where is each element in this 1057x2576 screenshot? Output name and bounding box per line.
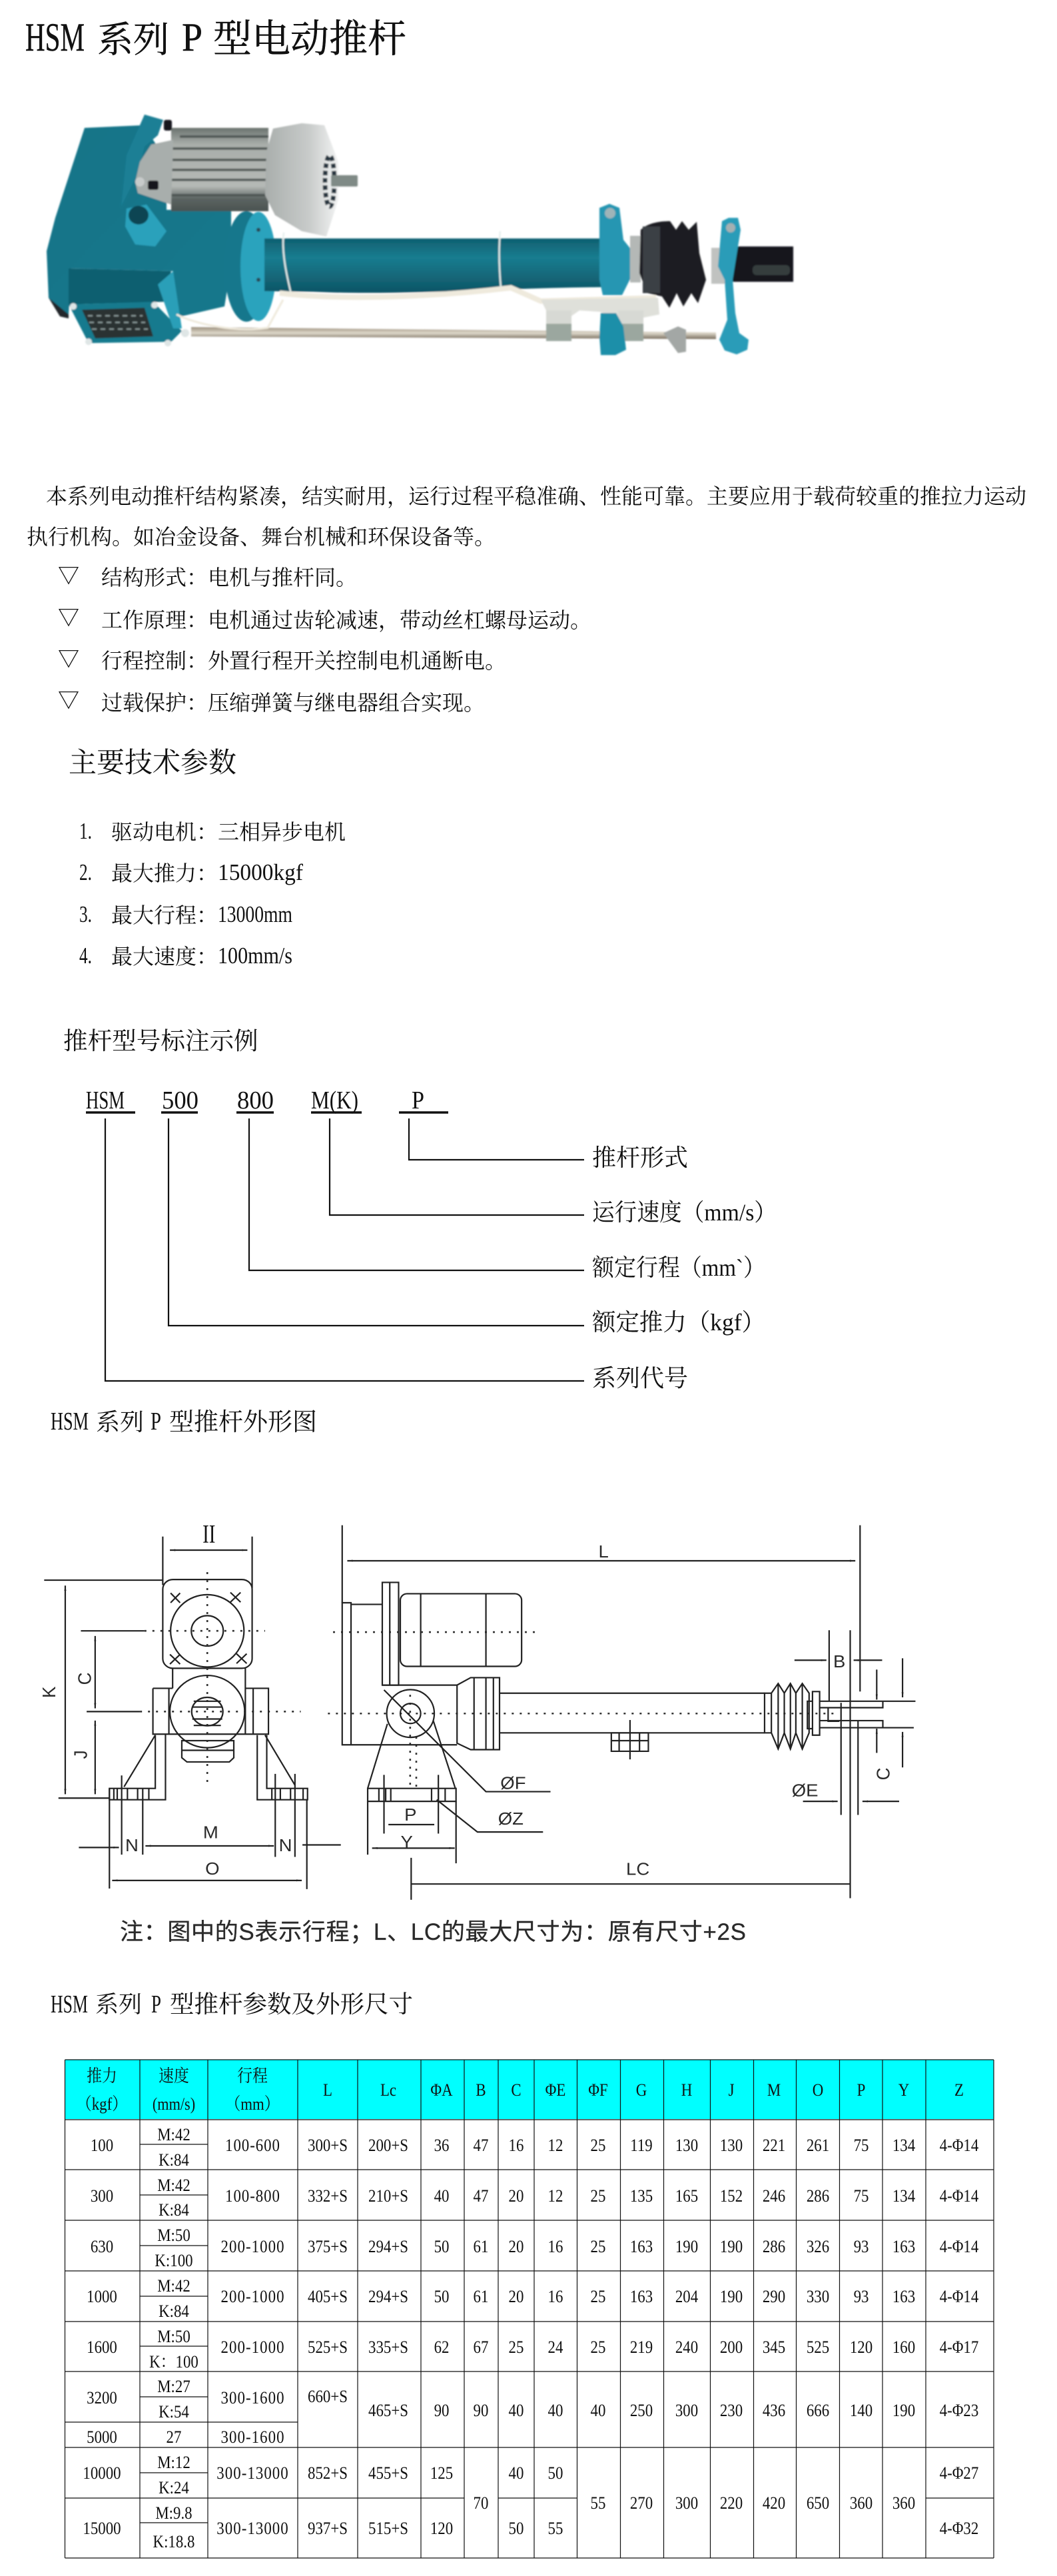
table row 1600: 335+S: [368, 2338, 408, 2357]
table row 1600: 160: [892, 2338, 915, 2357]
table row 300: 40: [434, 2187, 449, 2206]
table row 100: 300+S: [308, 2136, 348, 2155]
model notation diagram: 500: [162, 1086, 198, 1114]
table row 300: 246: [763, 2187, 785, 2206]
table rows 3200 and 5000: 300-1600: [220, 2389, 284, 2407]
parameter list: [79, 818, 346, 969]
parameter list: 100mm/s: [218, 943, 292, 969]
cone stop: [663, 326, 686, 353]
table row 10000: 4-Φ27: [940, 2464, 978, 2483]
table row 1600: 25: [509, 2338, 524, 2357]
heading: parameters and dimensions: 型推杆参数及外形尺寸: [170, 1990, 413, 2018]
table row 100: 221: [763, 2136, 785, 2155]
table header row: ΦF: [588, 2081, 608, 2100]
heading: parameters and dimensions: P: [151, 1990, 161, 2018]
table header background: [65, 2060, 994, 2119]
table row 300: 4-Φ14: [940, 2187, 978, 2206]
table row 100: [91, 2126, 978, 2170]
intro paragraph: 执行机构。如冶金设备、舞台机械和环保设备等。: [27, 525, 496, 549]
limit switch brackets: [541, 298, 659, 341]
table rows 3200 and 5000: 465+S: [368, 2401, 408, 2420]
table row 630: 163: [892, 2238, 915, 2256]
heading: outline drawing: 系列: [96, 1409, 144, 1436]
table row 1000: 204: [675, 2288, 698, 2306]
feature bullet list: 行程控制：外置行程开关控制电机通断电。: [101, 649, 506, 673]
table row 1000: 190: [720, 2288, 743, 2306]
table row 1000: 25: [591, 2288, 605, 2306]
table row 100: 130: [720, 2136, 743, 2155]
table row 300: K:84: [159, 2201, 189, 2220]
table row 630: 190: [675, 2238, 698, 2256]
drawing: side view: ØZ: [498, 1809, 524, 1829]
parameter list: 最大行程：: [111, 903, 218, 927]
dark rear cover: [49, 293, 69, 318]
table header row: ΦE: [545, 2081, 565, 2100]
table row 300: 286: [807, 2187, 829, 2206]
table row 1000: [87, 2277, 978, 2321]
drawing: front view: [39, 1519, 341, 1889]
table row 1000: 50: [434, 2288, 449, 2306]
table rows 3200 and 5000: 436: [763, 2401, 785, 2420]
table row 10000: 40: [509, 2464, 524, 2483]
table row 300: 100-800: [225, 2187, 280, 2206]
heading: outline drawing: [51, 1408, 317, 1436]
table row 1000: M:42: [157, 2277, 190, 2296]
table row 10000: K:24: [159, 2479, 189, 2497]
bellows: [639, 221, 706, 308]
table row 100: 261: [807, 2136, 829, 2155]
table row 1600: 525: [807, 2338, 829, 2357]
parameter list: 3.: [79, 901, 92, 927]
table header row: P: [857, 2081, 865, 2100]
parameter list: 最大速度：: [111, 945, 218, 969]
table rows 3200 and 5000: 230: [720, 2401, 743, 2420]
table row 100: 25: [591, 2136, 605, 2155]
table row 300: 332+S: [308, 2187, 348, 2206]
table header row: Y: [898, 2081, 910, 2100]
model notation diagram: [86, 1086, 777, 1392]
table row 1600: 1600: [87, 2338, 117, 2357]
table row 1600: 120: [850, 2338, 873, 2357]
lower clamp: [599, 313, 626, 355]
table row 15000: 4-Φ32: [940, 2519, 978, 2538]
table row 1000: 200-1000: [220, 2288, 284, 2306]
table row 630: 4-Φ14: [940, 2238, 978, 2256]
table row 630: 294+S: [368, 2238, 408, 2256]
table row 1600: 25: [591, 2338, 605, 2357]
title: HSM: [25, 15, 85, 59]
table row 630: M:50: [157, 2226, 190, 2245]
table row 630: 25: [591, 2238, 605, 2256]
table row 1600: 219: [630, 2338, 653, 2357]
table rows 3200 and 5000: 5000: [87, 2428, 117, 2447]
feature bullet list: ▽: [58, 564, 79, 588]
model notation diagram: 运行速度（mm/s）: [592, 1199, 777, 1226]
table row 100: 130: [675, 2136, 698, 2155]
parameter list: 最大推力：: [111, 861, 218, 885]
table row 1600: M:50: [157, 2328, 190, 2346]
table row 10000: 125: [430, 2464, 453, 2483]
heading: parameters and dimensions: 系列: [95, 1992, 142, 2018]
table header row: Z: [954, 2081, 964, 2100]
table row 1600: K：100: [149, 2353, 198, 2371]
table row 1600: 62: [434, 2338, 449, 2357]
table row 100: 4-Φ14: [940, 2136, 978, 2155]
table header row: G: [636, 2081, 647, 2100]
motor end shield: [135, 140, 173, 205]
table row 300: 47: [474, 2187, 488, 2206]
table row 1000: 290: [763, 2288, 785, 2306]
table rows 3200 and 5000: K:54: [159, 2403, 189, 2421]
table rows 3200 and 5000: 40: [509, 2401, 524, 2420]
table row 1000: 163: [892, 2288, 915, 2306]
table row 1000: K:84: [159, 2302, 189, 2321]
table row 100: 75: [854, 2136, 869, 2155]
parameter table: [65, 2060, 994, 2558]
drawing: side view: P: [404, 1805, 417, 1825]
drawing: side view: LC: [626, 1859, 649, 1879]
model notation diagram: P: [412, 1086, 424, 1114]
table rows 3200 and 5000: 4-Φ23: [940, 2401, 978, 2420]
table row 1600: 525+S: [308, 2338, 348, 2357]
table grid lines: [65, 2060, 994, 2558]
table row 15000: 120: [430, 2519, 453, 2538]
table header row: Lc: [380, 2081, 396, 2100]
table rows 3200 and 5000: 300-1600: [220, 2428, 284, 2447]
model notation diagram: 系列代号: [592, 1365, 688, 1392]
drawing: front view: O: [205, 1859, 220, 1879]
table row 300: 25: [591, 2187, 605, 2206]
product photo: electric push rod: [47, 115, 793, 355]
drawing: front view: J: [71, 1750, 91, 1759]
table row 10000: 300-13000: [216, 2464, 288, 2483]
motor ribbed housing: [171, 128, 268, 211]
table row 100: 134: [892, 2136, 915, 2155]
table row 100: 119: [630, 2136, 653, 2155]
table header row: L: [323, 2081, 332, 2100]
parameter list: 2.: [79, 859, 92, 885]
table row 300: 20: [509, 2187, 524, 2206]
table row 1600: 240: [675, 2338, 698, 2357]
feature bullet list: ▽: [58, 606, 79, 630]
table row 1000: 93: [854, 2288, 869, 2306]
table row 1000: 16: [548, 2288, 563, 2306]
table row 100: 200+S: [368, 2136, 408, 2155]
cable boss: [125, 205, 167, 246]
silver collar: [630, 236, 641, 282]
table row 100: 12: [548, 2136, 563, 2155]
merged cells for rows 10000 and 15000: 270: [630, 2494, 653, 2513]
heading: outline drawing: 型推杆外形图: [169, 1408, 317, 1436]
parameter list: 驱动电机：三相异步电机: [111, 820, 346, 844]
drawing: side view: C: [873, 1767, 894, 1780]
feature bullet list: ▽: [58, 688, 79, 712]
table row 1000: 405+S: [308, 2288, 348, 2306]
model notation diagram: 推杆形式: [592, 1144, 688, 1171]
table row 100: 47: [474, 2136, 488, 2155]
table rows 3200 and 5000: 300: [675, 2401, 698, 2420]
table header row: 推力: [87, 2066, 117, 2086]
parameter list: 4.: [79, 943, 92, 969]
table rows 3200 and 5000: [87, 2377, 978, 2447]
feature bullet list: [58, 564, 591, 715]
table row 630: 16: [548, 2238, 563, 2256]
gearbox body: [47, 125, 231, 318]
drawing: front view: N: [125, 1836, 139, 1855]
drawing: front view: M: [203, 1823, 218, 1842]
table row 15000: 15000: [83, 2519, 121, 2538]
table row 100: K:84: [159, 2151, 189, 2170]
table row 10000: 50: [548, 2464, 563, 2483]
table rows 3200 and 5000: 660+S: [308, 2387, 348, 2406]
title: 系列: [97, 20, 169, 60]
merged cells for rows 10000 and 15000: 300: [675, 2494, 698, 2513]
model notation diagram: 额定行程（mm`）: [592, 1254, 765, 1281]
drawing: side view: Y: [401, 1833, 413, 1852]
title: [25, 15, 406, 61]
table rows 3200 and 5000: 250: [630, 2401, 653, 2420]
drawing: side view: ØF: [500, 1773, 526, 1793]
table row 10000: [83, 2453, 978, 2497]
table row 1000: 330: [807, 2288, 829, 2306]
table row 1600: 24: [548, 2338, 563, 2357]
feature bullet list: 过载保护：压缩弹簧与继电器组合实现。: [101, 691, 485, 715]
table row 1600: 4-Φ17: [940, 2338, 978, 2357]
drawing: side view: L: [598, 1542, 609, 1561]
merged cells for rows 10000 and 15000: 420: [763, 2494, 785, 2513]
table row 10000: 455+S: [368, 2464, 408, 2483]
table header row: 行程: [237, 2066, 268, 2086]
drawing: front view: K: [39, 1686, 59, 1698]
merged cells for rows 10000 and 15000: [474, 2494, 915, 2513]
drawing: side view: ØE: [792, 1781, 819, 1800]
table rows 3200 and 5000: 40: [591, 2401, 605, 2420]
tube flange: [224, 211, 276, 322]
table header row: H: [681, 2081, 692, 2100]
table header row: J: [729, 2081, 735, 2100]
fan cover: [265, 123, 358, 236]
table rows 3200 and 5000: 40: [548, 2401, 563, 2420]
table rows 3200 and 5000: 90: [474, 2401, 488, 2420]
title: 型电动推杆: [213, 17, 406, 61]
table row 15000: 300-13000: [216, 2519, 288, 2538]
table row 300: 135: [630, 2187, 653, 2206]
table row 1600: 200-1000: [220, 2338, 284, 2357]
merged cells for rows 10000 and 15000: 55: [591, 2494, 605, 2513]
table header row: M: [767, 2081, 781, 2100]
table row 10000: M:12: [157, 2453, 190, 2472]
table row 1000: 1000: [87, 2288, 117, 2306]
rod end: [711, 248, 730, 284]
table row 300: 152: [720, 2187, 743, 2206]
table rows 3200 and 5000: 90: [434, 2401, 449, 2420]
table row 15000: 50: [509, 2519, 524, 2538]
drawing note: 注：图中的S表示行程；L、LC的最大尺寸为：原有尺寸+2S: [120, 1919, 746, 1945]
table row 630: 326: [807, 2238, 829, 2256]
table row 630: 286: [763, 2238, 785, 2256]
table row 15000: 55: [548, 2519, 563, 2538]
feature bullet list: 结构形式：电机与推杆同。: [101, 566, 357, 590]
table rows 3200 and 5000: 3200: [87, 2389, 117, 2407]
table header row: B: [476, 2081, 486, 2100]
table row 630: 93: [854, 2238, 869, 2256]
table row 630: 20: [509, 2238, 524, 2256]
table row 630: 50: [434, 2238, 449, 2256]
table row 1000: 61: [474, 2288, 488, 2306]
heading: parameters and dimensions: [51, 1990, 413, 2018]
front clamp: [599, 204, 631, 295]
table header row: （kgf）: [77, 2095, 127, 2114]
parameter list: 1.: [79, 818, 92, 844]
merged cells for rows 10000 and 15000: 220: [720, 2494, 743, 2513]
white cable: [280, 288, 656, 301]
intro paragraph: 本系列电动推杆结构紧凑，结实耐用，运行过程平稳准确、性能可靠。主要应用于载荷较重的推拉力运动: [46, 484, 1026, 508]
table row 630: 200-1000: [220, 2238, 284, 2256]
feature bullet list: 工作原理：电机通过齿轮减速，带动丝杠螺母运动。: [101, 608, 591, 632]
parameter list: 15000kgf: [218, 859, 303, 885]
table rows 3200 and 5000: 27: [167, 2428, 181, 2447]
merged cells for rows 10000 and 15000: 650: [807, 2494, 829, 2513]
table row 1000: 4-Φ14: [940, 2288, 978, 2306]
table row 100: 100-600: [225, 2136, 280, 2155]
table header row: C: [511, 2081, 522, 2100]
table row 100: 16: [509, 2136, 524, 2155]
heading: model notation example: 推杆型号标注示例: [63, 1027, 258, 1055]
table row 15000: M:9.8: [155, 2504, 192, 2523]
table row 15000: 937+S: [308, 2519, 348, 2538]
table row 630: [91, 2226, 978, 2270]
table header row: 速度: [159, 2066, 189, 2086]
drawing: side view: [328, 1525, 915, 1900]
switch box with nameplate: [69, 268, 189, 346]
title: P: [182, 15, 202, 59]
table rows 3200 and 5000: 140: [850, 2401, 873, 2420]
table row 15000: K:18.8: [153, 2533, 194, 2551]
merged cells for rows 10000 and 15000: 360: [892, 2494, 915, 2513]
intro paragraph: [27, 484, 1026, 549]
table row 1000: 20: [509, 2288, 524, 2306]
table row 1600: 67: [474, 2338, 488, 2357]
table row 300: 210+S: [368, 2187, 408, 2206]
heading: parameters and dimensions: HSM: [51, 1990, 88, 2018]
table row 100: 36: [434, 2136, 449, 2155]
drawing: front view: C: [75, 1672, 95, 1685]
drawing: front view: II: [202, 1519, 215, 1548]
table rows 3200 and 5000: M:27: [157, 2377, 190, 2396]
table row 10000: 10000: [83, 2464, 121, 2483]
table row 300: 134: [892, 2187, 915, 2206]
table row 630: 190: [720, 2238, 743, 2256]
merged cells for rows 10000 and 15000: 360: [850, 2494, 873, 2513]
table header row: [77, 2066, 964, 2114]
heading: outline drawing: HSM: [51, 1408, 89, 1436]
table row 630: 630: [91, 2238, 113, 2256]
table row 100: 100: [91, 2136, 113, 2155]
parameter list: 13000mm: [218, 901, 292, 927]
heading: outline drawing: P: [151, 1408, 161, 1436]
table row 15000: 515+S: [368, 2519, 408, 2538]
table header row: （mm）: [225, 2095, 280, 2114]
table row 300: 75: [854, 2187, 869, 2206]
model notation diagram: 额定推力（kgf）: [592, 1309, 765, 1336]
model notation diagram: M(K): [311, 1086, 358, 1114]
model notation diagram: HSM: [86, 1086, 125, 1114]
table row 10000: 852+S: [308, 2464, 348, 2483]
table row 1000: 294+S: [368, 2288, 408, 2306]
table row 100: M:42: [157, 2126, 190, 2144]
merged cells for rows 10000 and 15000: 70: [474, 2494, 488, 2513]
table header row: (mm/s): [153, 2095, 195, 2114]
table row 300: 300: [91, 2187, 113, 2206]
table rows 3200 and 5000: 190: [892, 2401, 915, 2420]
table row 630: 375+S: [308, 2238, 348, 2256]
model notation diagram: 800: [237, 1086, 274, 1114]
feature bullet list: ▽: [58, 647, 79, 671]
heading: main technical parameters: 主要技术参数: [69, 748, 236, 779]
table row 1600: 345: [763, 2338, 785, 2357]
table header row: ΦA: [430, 2081, 453, 2100]
table row 15000: [83, 2504, 978, 2551]
table header row: O: [813, 2081, 823, 2100]
table row 630: 61: [474, 2238, 488, 2256]
cylinder tube: [264, 238, 603, 293]
table row 300: 165: [675, 2187, 698, 2206]
table row 300: M:42: [157, 2176, 190, 2195]
table row 630: 163: [630, 2238, 653, 2256]
table rows 3200 and 5000: 666: [807, 2401, 829, 2420]
table row 1000: 163: [630, 2288, 653, 2306]
table row 1600: [87, 2328, 978, 2371]
table row 300: 12: [548, 2187, 563, 2206]
table row 1600: 200: [720, 2338, 743, 2357]
motor flange: [121, 115, 163, 207]
long lower guide rod: [191, 327, 716, 339]
table row 300: [91, 2176, 978, 2220]
rear bracket: [718, 218, 749, 354]
drawing: side view: B: [833, 1652, 845, 1671]
drawing: front view: N: [279, 1836, 292, 1855]
table row 630: K:100: [155, 2252, 193, 2270]
